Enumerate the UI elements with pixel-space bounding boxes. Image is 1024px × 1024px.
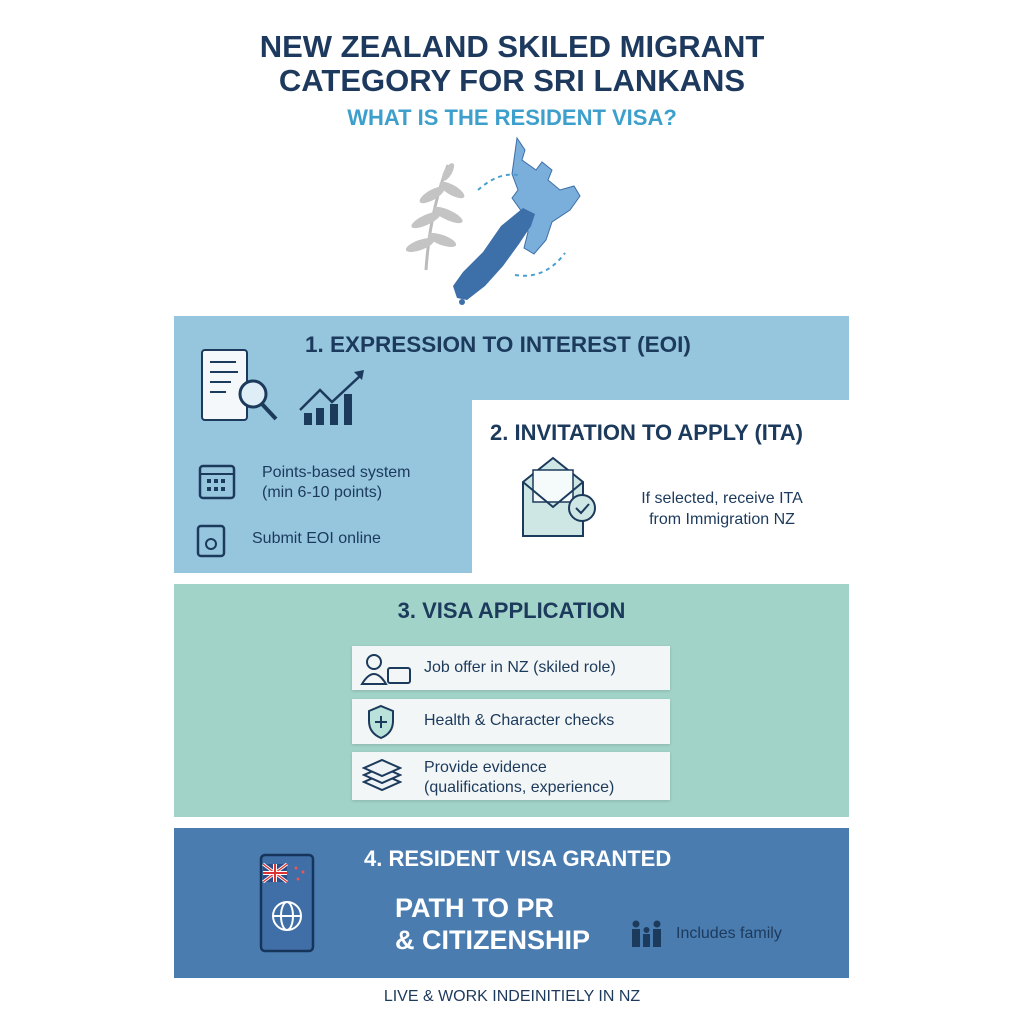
icon: NZ map with fern: [406, 136, 580, 305]
icon: submit: [196, 524, 226, 558]
text: path to PR: & CITIZENSHIP: [395, 925, 590, 955]
item: health checks: [352, 699, 670, 744]
icon: document search & chart: [201, 349, 364, 425]
panel: 1 EOI: [174, 316, 849, 573]
text: submit EOI: Submit EOI online: [252, 530, 381, 547]
text: points: (min 6-10 points): [262, 484, 382, 501]
item: evidence: (qualifications, experience): [424, 779, 614, 796]
item: job offer: Job offer in NZ (skiled role): [424, 659, 616, 676]
text: points: Points-based system: [262, 464, 411, 481]
footer text: LIVE & WORK INDEINITIELY IN NZ: [384, 988, 640, 1005]
subtitle: WHAT IS THE RESIDENT VISA?: [347, 105, 677, 130]
heading 1: 1. EXPRESSION TO INTEREST (EOI): [305, 332, 691, 357]
heading 2: 2. INVITATION TO APPLY (ITA): [490, 420, 803, 445]
item: job offer: [352, 646, 670, 690]
text: path to PR: [395, 893, 590, 955]
text: ITA: [641, 490, 803, 528]
panel: 4 resident visa: [174, 828, 849, 978]
heading 4: 4. RESIDENT VISA GRANTED: [364, 846, 671, 871]
item: evidence: [352, 752, 670, 800]
item: evidence: Provide evidence: [424, 759, 547, 776]
text: ITA: from Immigration NZ: [649, 511, 795, 528]
heading 3: 3. VISA APPLICATION: [398, 598, 625, 623]
panel: 3 visa application: [174, 584, 849, 817]
title: CATEGORY FOR SRI LANKANS: [279, 63, 745, 98]
icon: passport: [260, 854, 314, 952]
text: points: [262, 464, 411, 501]
icon: envelope: [522, 456, 596, 537]
text: family: Includes family: [676, 925, 782, 942]
item: health checks: Health & Character checks: [424, 712, 614, 729]
title: NEW ZEALAND SKILED MIGRANT: [260, 29, 764, 64]
text: path to PR: PATH TO PR: [395, 893, 554, 923]
icon: calendar: [198, 464, 236, 500]
text: ITA: If selected, receive ITA: [641, 490, 803, 507]
panel: 2 ITA: [490, 420, 803, 537]
title: [260, 29, 764, 98]
icon: family: [632, 920, 661, 947]
